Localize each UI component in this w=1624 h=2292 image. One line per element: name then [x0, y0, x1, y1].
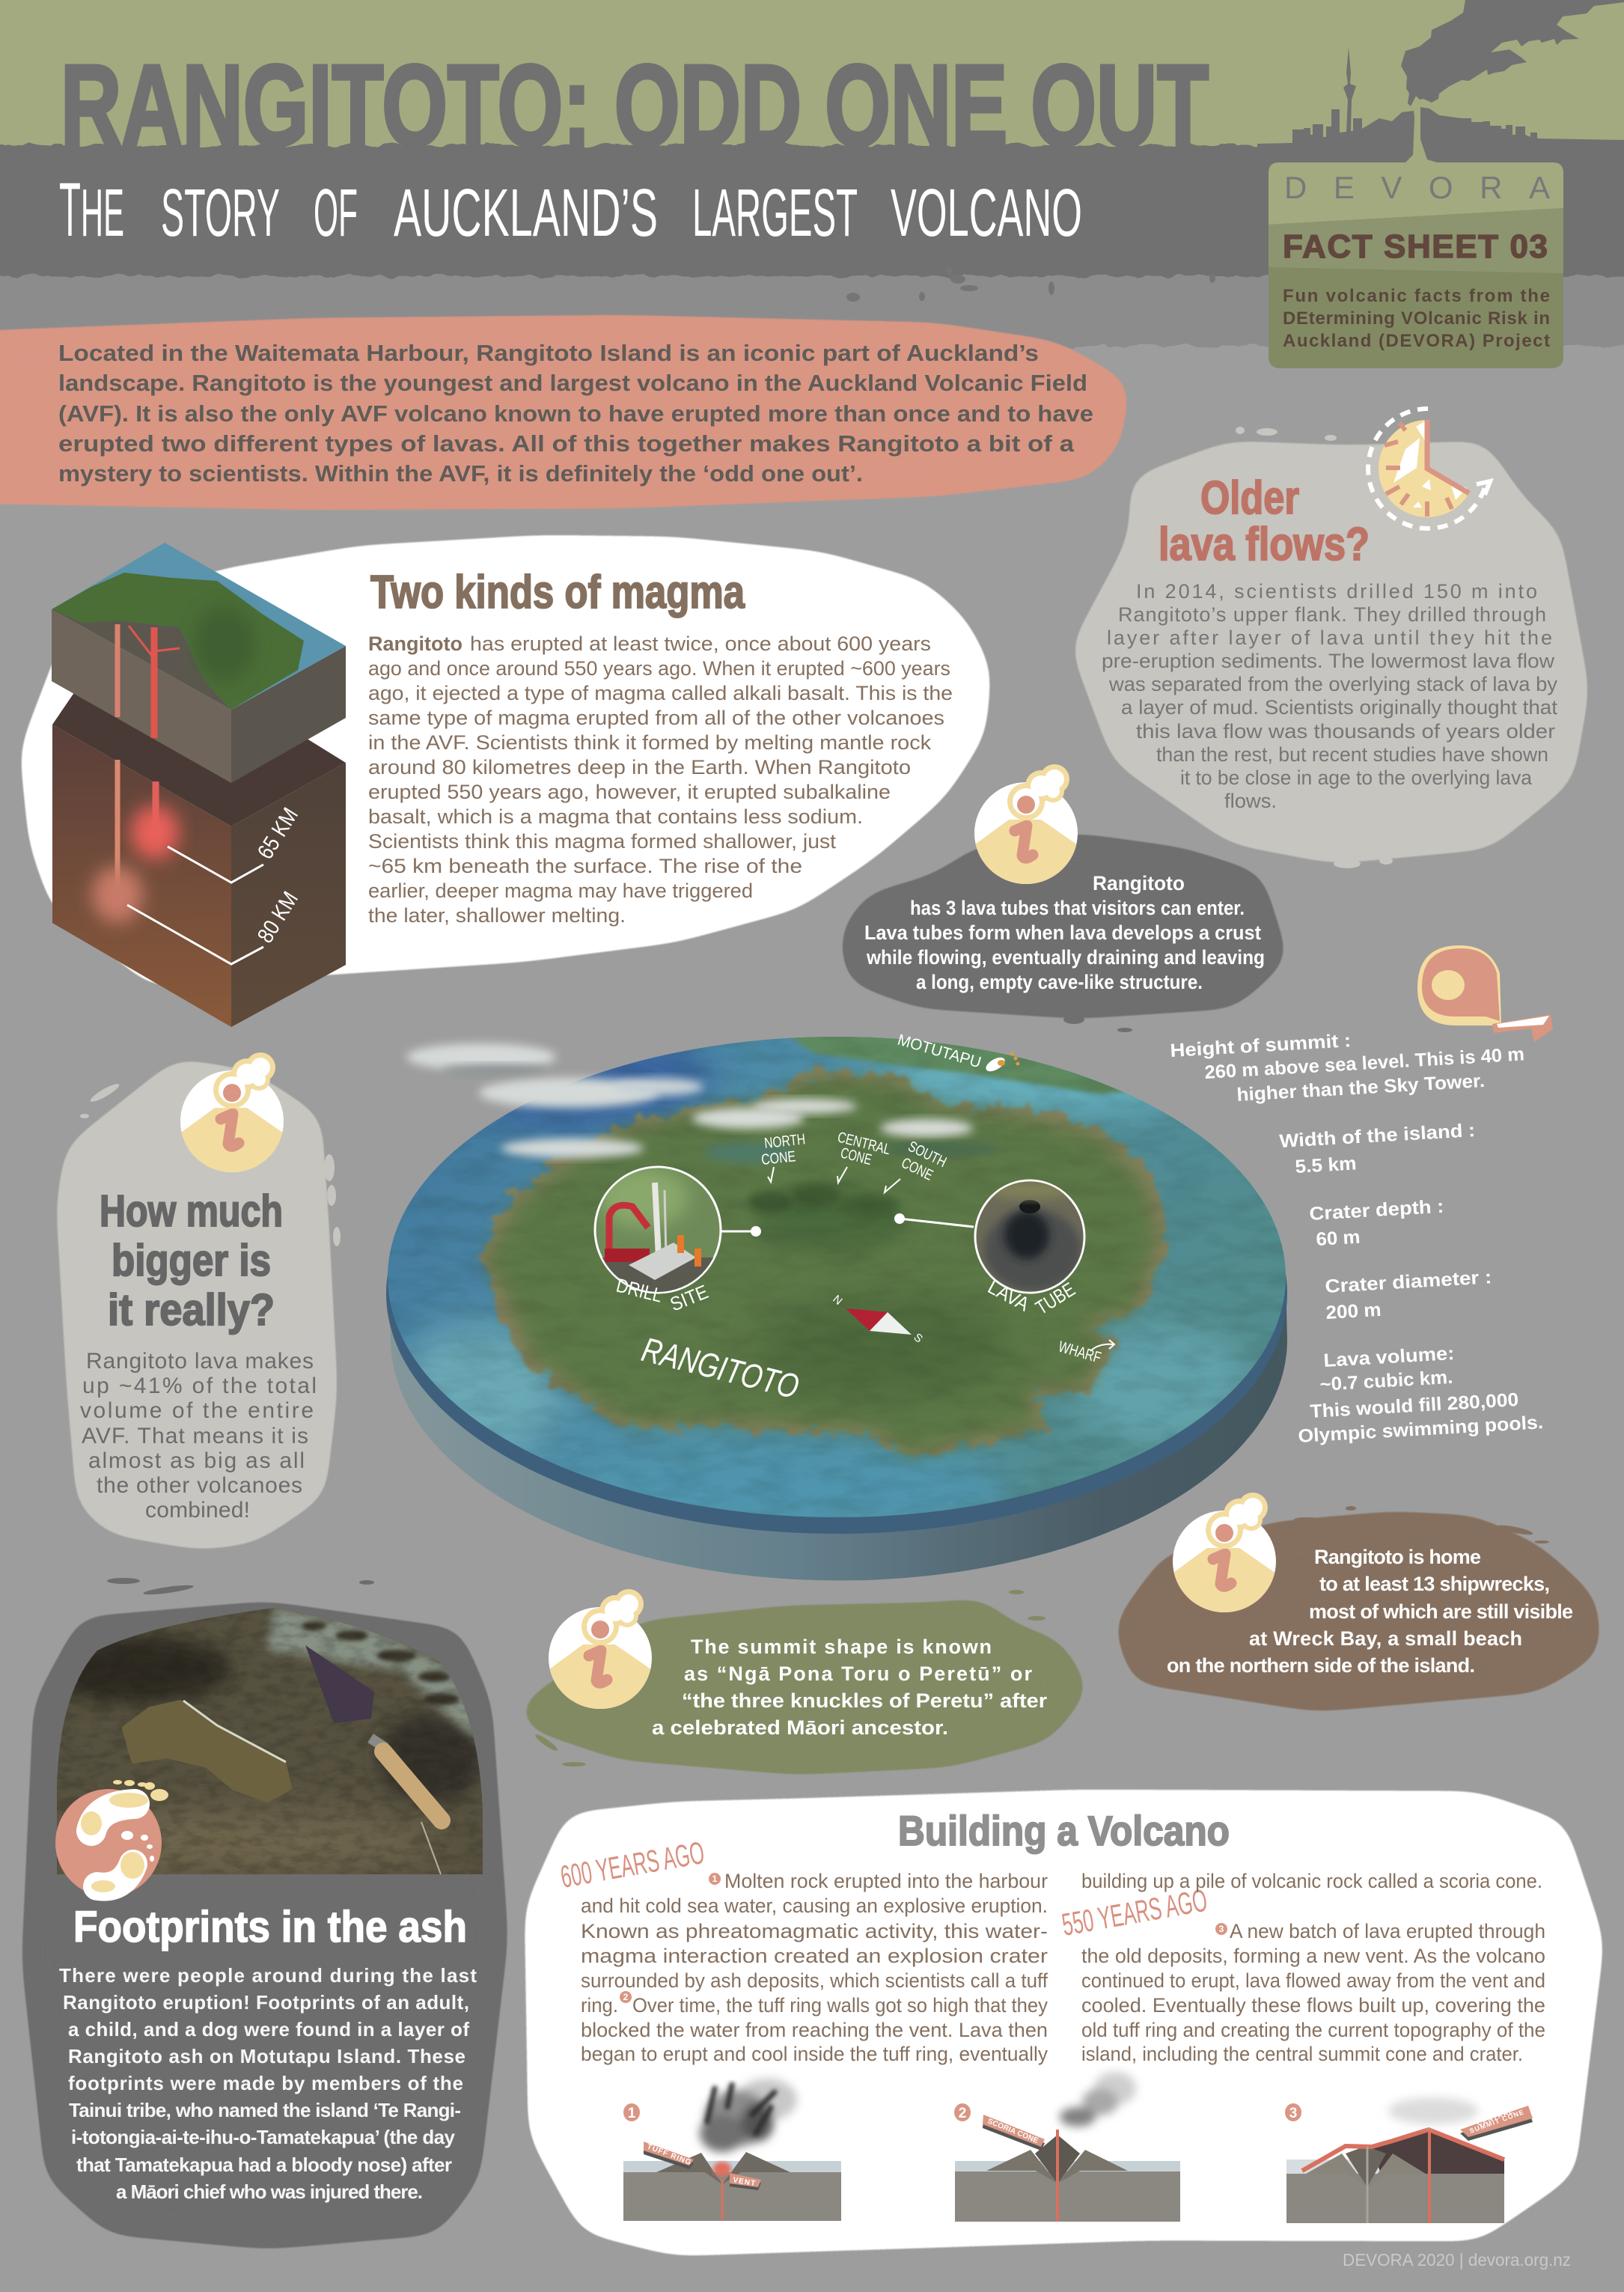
shipwreck text: to at least 13 shipwrecks, — [1319, 1573, 1550, 1595]
label: lava tube: TUBE — [1031, 1278, 1079, 1319]
label: lava tube — [984, 1275, 1079, 1319]
older lava text: layer after layer of lava until they hit the — [1107, 627, 1552, 649]
left column text: magma interaction created an explosion crater — [581, 1945, 1048, 1967]
fact: height of summit — [1170, 1030, 1525, 1106]
badge description: DEtermining VOlcanic Risk in — [1283, 308, 1550, 329]
step bullets: 1 — [712, 1874, 718, 1884]
fact sheet number: FACT SHEET 03 — [1283, 228, 1548, 265]
fact: height of summit: Height of summit : — [1170, 1030, 1352, 1061]
older lava text: than the rest, but recent studies have shown — [1156, 743, 1548, 766]
icon: info volcano — [970, 764, 1082, 889]
island map disc — [374, 1025, 1302, 1581]
icon: clock of geological time — [1368, 409, 1490, 528]
fact: crater depth — [1309, 1196, 1444, 1250]
older lava text — [1102, 580, 1558, 812]
how much bigger text: combined! — [145, 1498, 250, 1523]
right column text: cooled. Eventually these flows built up, covering the — [1081, 1994, 1545, 2017]
right column text: building up a pile of volcanic rock called a scoria cone. — [1081, 1870, 1542, 1892]
panel: summit name fact — [507, 1589, 1100, 1783]
magma text: in the AVF. Scientists think it formed by melting mantle rock — [368, 731, 932, 754]
label: drill site: DRILL — [614, 1274, 665, 1307]
diagram 3: central summit cone — [1285, 2097, 1533, 2223]
heading: Footprints in the ash — [73, 1903, 467, 1951]
lava tube text: Lava tubes form when lava develops a crust — [864, 921, 1261, 944]
icon: info volcano — [544, 1589, 656, 1714]
step bullets: 3 — [1219, 1924, 1224, 1934]
diagram 3: central summit cone: CENTRAL — [1476, 2107, 1514, 2127]
diagram 2: scoria cone — [954, 2072, 1180, 2222]
right column text — [1081, 1870, 1545, 2065]
heading: it really? — [108, 1285, 275, 1335]
left column text: and hit cold sea water, causing an explosive eruption. — [581, 1895, 1048, 1917]
depth marker: 65 km — [168, 803, 303, 883]
footprints text: a child, and a dog were found in a layer of — [68, 2018, 469, 2040]
panel: older lava flows — [1061, 409, 1598, 872]
subtitle: LARGEST — [692, 176, 858, 251]
left column text: Known as phreatomagmatic activity, this water- — [581, 1920, 1048, 1942]
panel: shipwrecks fact — [1104, 1493, 1609, 1720]
diagram 2: scoria cone: 2 — [959, 2106, 966, 2121]
Motutapu island — [787, 1037, 1126, 1097]
fact: height of summit: higher than the Sky Tower. — [1236, 1070, 1486, 1106]
subtitle: STORY — [161, 176, 280, 251]
icon: small footprint — [983, 1052, 1019, 1074]
label: south cone: SOUTH — [906, 1139, 949, 1171]
label: 550 years ago: 550 YEARS AGO — [1059, 1883, 1210, 1942]
label: central cone: CONE — [839, 1145, 873, 1168]
fact: crater diameter — [1325, 1267, 1492, 1323]
inset: lava tube — [975, 1180, 1084, 1293]
magma text: Rangitoto — [368, 633, 463, 655]
icon: info volcano — [1168, 1493, 1280, 1618]
magma text: ~65 km beneath the surface. The rise of the — [368, 855, 802, 877]
panel: building a volcano — [516, 1782, 1613, 2264]
shipwreck text: Rangitoto is home — [1314, 1546, 1481, 1568]
badge description — [1283, 286, 1550, 351]
magma text: erupted 550 years ago, however, it erupted subalkaline — [368, 781, 891, 803]
magma text: ago and once around 550 years ago. When it erupted ~600 years — [368, 657, 950, 680]
magma text: same type of magma erupted from all of the other volcanoes — [368, 707, 944, 729]
lava tube text: has 3 lava tubes that visitors can enter. — [910, 897, 1245, 919]
subtitle: OF — [314, 176, 358, 251]
label: Motutapu: MOTUTAPU — [896, 1031, 983, 1072]
panel: introduction — [0, 307, 1139, 518]
intro text — [58, 340, 1093, 487]
fact: lava volume: Olympic swimming pools. — [1298, 1412, 1544, 1447]
fact: crater diameter: 200 m — [1325, 1299, 1382, 1323]
left column text: Molten rock erupted into the harbour — [724, 1870, 1048, 1892]
how much bigger text — [80, 1349, 317, 1523]
older lava text: a layer of mud. Scientists originally thought that — [1121, 696, 1558, 719]
how much bigger text: AVF. That means it is — [82, 1424, 308, 1448]
how much bigger text: almost as big as all — [88, 1448, 305, 1473]
label: north cone: NORTH — [763, 1131, 806, 1152]
island key facts — [1170, 1030, 1544, 1447]
depth marker: 80 km: 80 KM — [253, 887, 303, 948]
panel: DEVORA fact sheet badge — [1269, 162, 1563, 368]
icon: tape measure — [1417, 945, 1553, 1042]
label: central cone — [836, 1130, 892, 1183]
icon: footprints badge — [55, 1780, 168, 1897]
footprints text: footprints were made by members of the — [68, 2072, 463, 2094]
left column text: blocked the water from reaching the vent. Lava then — [581, 2019, 1048, 2041]
lava tube text — [864, 872, 1265, 993]
older lava text: In 2014, scientists drilled 150 m into — [1136, 580, 1537, 603]
Auckland skyline and eruption silhouette — [1257, 0, 1624, 162]
right column text: continued to erupt, lava flowed away from the vent and — [1081, 1969, 1545, 1992]
label: north cone: CONE — [760, 1148, 796, 1168]
summit text: as “Ngā Pona Toru o Peretū” or — [684, 1662, 1032, 1685]
label: drill site — [614, 1274, 711, 1316]
intro text: Located in the Waitemata Harbour, Rangitoto Island is an iconic part of Auckland’s — [58, 340, 1039, 366]
fact: crater depth: 60 m — [1316, 1227, 1361, 1250]
subtitle: VOLCANO — [891, 176, 1082, 251]
panel: lava tubes fact — [831, 764, 1298, 1032]
footprints text: a Māori chief who was injured there. — [116, 2180, 423, 2203]
right column text: A new batch of lava erupted through — [1230, 1920, 1545, 1942]
diagram 1: tuff ring: TUFF RING — [646, 2143, 692, 2167]
fact: crater depth: Crater depth : — [1309, 1196, 1444, 1225]
shipwreck text: on the northern side of the island. — [1167, 1654, 1475, 1677]
clouds beyond the disc — [406, 1043, 703, 1158]
how much bigger text: Rangitoto lava makes — [86, 1349, 314, 1374]
footprints text: that Tamatekapua had a bloody nose) after — [76, 2154, 452, 2176]
left column text — [581, 1870, 1048, 2065]
magma text: around 80 kilometres deep in the Earth. When Rangitoto — [368, 756, 911, 778]
panel: two kinds of magma — [11, 527, 1000, 1027]
label: drill site: SITE — [667, 1280, 711, 1316]
older lava text: pre-eruption sediments. The lowermost lava flow — [1102, 650, 1555, 672]
drill site pointer — [721, 1226, 761, 1237]
left column text: Over time, the tuff ring walls got so high that they — [632, 1994, 1048, 2017]
how much bigger text: up ~41% of the total — [82, 1374, 317, 1398]
footprints text: Rangitoto eruption! Footprints of an adult, — [63, 1991, 469, 2014]
how much bigger text: volume of the entire — [80, 1398, 314, 1423]
magma text: basalt, which is a magma that contains less sodium. — [368, 805, 863, 828]
step bullets — [620, 1873, 1227, 2003]
intro text: landscape. Rangitoto is the youngest and largest volcano in the Auckland Volcanic Field — [58, 370, 1087, 396]
footprints text — [59, 1964, 477, 2203]
older lava text: this lava flow was thousands of years older — [1136, 720, 1555, 743]
how much bigger text: the other volcanoes — [97, 1473, 302, 1498]
compass: N — [830, 1293, 845, 1308]
diagram 1: tuff ring: 1 — [628, 2106, 636, 2121]
icon: info volcano — [176, 1052, 288, 1177]
magma text — [368, 633, 953, 927]
shipwreck text — [1167, 1546, 1573, 1677]
heading: bigger is — [112, 1236, 271, 1285]
label: north cone — [760, 1131, 806, 1182]
footprints text: Rangitoto ash on Motutapu Island. These — [68, 2045, 465, 2067]
lava tube text: a long, empty cave-like structure. — [916, 971, 1203, 993]
diagram 2: scoria cone: SCORIA CONE — [986, 2118, 1040, 2145]
magma depth block diagram — [52, 543, 346, 1027]
subtitle — [59, 167, 1082, 252]
diagram 3: central summit cone: 3 — [1289, 2106, 1297, 2121]
lava tube text: Rangitoto — [1093, 872, 1185, 894]
fact: crater diameter: Crater diameter : — [1325, 1267, 1492, 1297]
footprints text: i-totongia-ai-te-ihu-o-Tamatekapua’ (the day — [71, 2126, 456, 2148]
heading — [1159, 472, 1370, 570]
summit text: The summit shape is known — [691, 1636, 992, 1658]
fact: width of island: Width of the island : — [1279, 1120, 1476, 1152]
panel: footprints in the ash — [13, 1578, 516, 2258]
left column text: began to erupt and cool inside the tuff ring, eventually — [581, 2043, 1048, 2065]
Rangitoto island — [476, 1072, 1168, 1461]
label: 600 years ago: 600 YEARS AGO — [558, 1835, 707, 1895]
label: central cone: CENTRAL — [836, 1130, 892, 1158]
fact: width of island: 5.5 km — [1295, 1153, 1357, 1177]
inset: drill site — [591, 1167, 726, 1295]
left column text: surrounded by ash deposits, which scientists call a tuff — [581, 1969, 1048, 1992]
label: lava tube: LAVA — [984, 1275, 1034, 1316]
heading: How much — [100, 1186, 283, 1236]
heading: lava flows? — [1159, 519, 1370, 570]
fact: lava volume — [1298, 1343, 1544, 1447]
heading: Two kinds of magma — [370, 567, 745, 618]
older lava text: it to be close in age to the overlying lava — [1180, 766, 1533, 789]
depth marker: 65 km: 65 KM — [253, 803, 303, 864]
painterly grain — [374, 1025, 1302, 1534]
footprints text: Tainui tribe, who named the island ‘Te Rangi- — [69, 2099, 461, 2121]
lava tube pointer — [894, 1213, 974, 1227]
footprints text: There were people around during the last — [59, 1964, 477, 1987]
heading: Older — [1200, 472, 1299, 524]
magma text: the later, shallower melting. — [368, 904, 626, 927]
magma text: earlier, deeper magma may have triggered — [368, 880, 753, 902]
DEVORA wordmark: DEVORA — [1284, 170, 1550, 205]
subtitle: THE — [59, 167, 124, 252]
right column text: the old deposits, forming a new vent. As the volcano — [1081, 1945, 1545, 1967]
photo: footprint in ash with trowel — [37, 1602, 486, 1879]
disc side wall — [388, 1277, 1287, 1581]
lava tube text: while flowing, eventually draining and leaving — [866, 946, 1265, 969]
summit text — [652, 1636, 1048, 1739]
shipwreck text: at Wreck Bay, a small beach — [1249, 1627, 1522, 1650]
depth marker: 80 km — [127, 887, 303, 964]
sea surface — [388, 1037, 1286, 1517]
magma text: ago, it ejected a type of magma called alkali basalt. This is the — [368, 682, 953, 704]
diagram 1: tuff ring — [623, 2079, 841, 2221]
compass: S — [911, 1331, 925, 1346]
label: Rangitoto: RANGITOTO — [638, 1329, 803, 1406]
footer credit: DEVORA 2020 | devora.org.nz — [1343, 2250, 1571, 2270]
diagram 1: tuff ring: VENT — [732, 2176, 756, 2188]
compass — [830, 1293, 925, 1346]
fact: height of summit: 260 m above sea level. This is 40 m — [1204, 1043, 1525, 1083]
badge description: Fun volcanic facts from the — [1283, 286, 1550, 306]
fact: lava volume: This would fill 280,000 — [1310, 1389, 1519, 1422]
intro text: (AVF). It is also the only AVF volcano known to have erupted more than once and to have — [58, 400, 1093, 427]
left column text: ring. — [581, 1994, 618, 2017]
heading — [100, 1186, 283, 1335]
older lava text: flows. — [1224, 790, 1277, 812]
fact: lava volume: Lava volume: — [1323, 1343, 1455, 1371]
badge description: Auckland (DEVORA) Project — [1283, 331, 1550, 351]
summit text: “the three knuckles of Peretu” after — [682, 1689, 1048, 1712]
panel: how much bigger — [48, 1049, 346, 1558]
fact: lava volume: ~0.7 cubic km. — [1319, 1367, 1453, 1395]
intro text: mystery to scientists. Within the AVF, it is definitely the ‘odd one out’. — [58, 460, 863, 487]
clouds over the island — [692, 1099, 999, 1163]
magma text: Scientists think this magma formed shallower, just — [368, 830, 837, 853]
intro text: erupted two different types of lavas. All of this together makes Rangitoto a bit of a — [58, 430, 1075, 457]
shipwreck text: most of which are still visible — [1309, 1600, 1573, 1623]
fact: width of island — [1279, 1120, 1476, 1177]
header backdrop — [0, 0, 1624, 346]
older lava text: was separated from the overlying stack of lava by — [1108, 673, 1557, 695]
label: wharf: WHARF — [1057, 1338, 1103, 1367]
label: south cone — [885, 1139, 949, 1192]
right column text: island, including the central summit cone and crater. — [1081, 2043, 1523, 2065]
heading: Building a Volcano — [898, 1807, 1230, 1854]
step bullets: 2 — [623, 1992, 629, 2002]
title: RANGITOTO: ODD ONE OUT — [61, 41, 1209, 170]
diagram 3: central summit cone: SUMMIT CONE — [1468, 2108, 1524, 2135]
magma text: has erupted at least twice, once about 600 years — [470, 633, 931, 655]
label: south cone: CONE — [899, 1155, 935, 1184]
subtitle: AUCKLAND’S — [394, 176, 658, 251]
older lava text: Rangitoto’s upper flank. They drilled through — [1118, 603, 1546, 626]
right column text: old tuff ring and creating the current topography of the — [1081, 2019, 1545, 2041]
summit text: a celebrated Māori ancestor. — [652, 1716, 948, 1739]
